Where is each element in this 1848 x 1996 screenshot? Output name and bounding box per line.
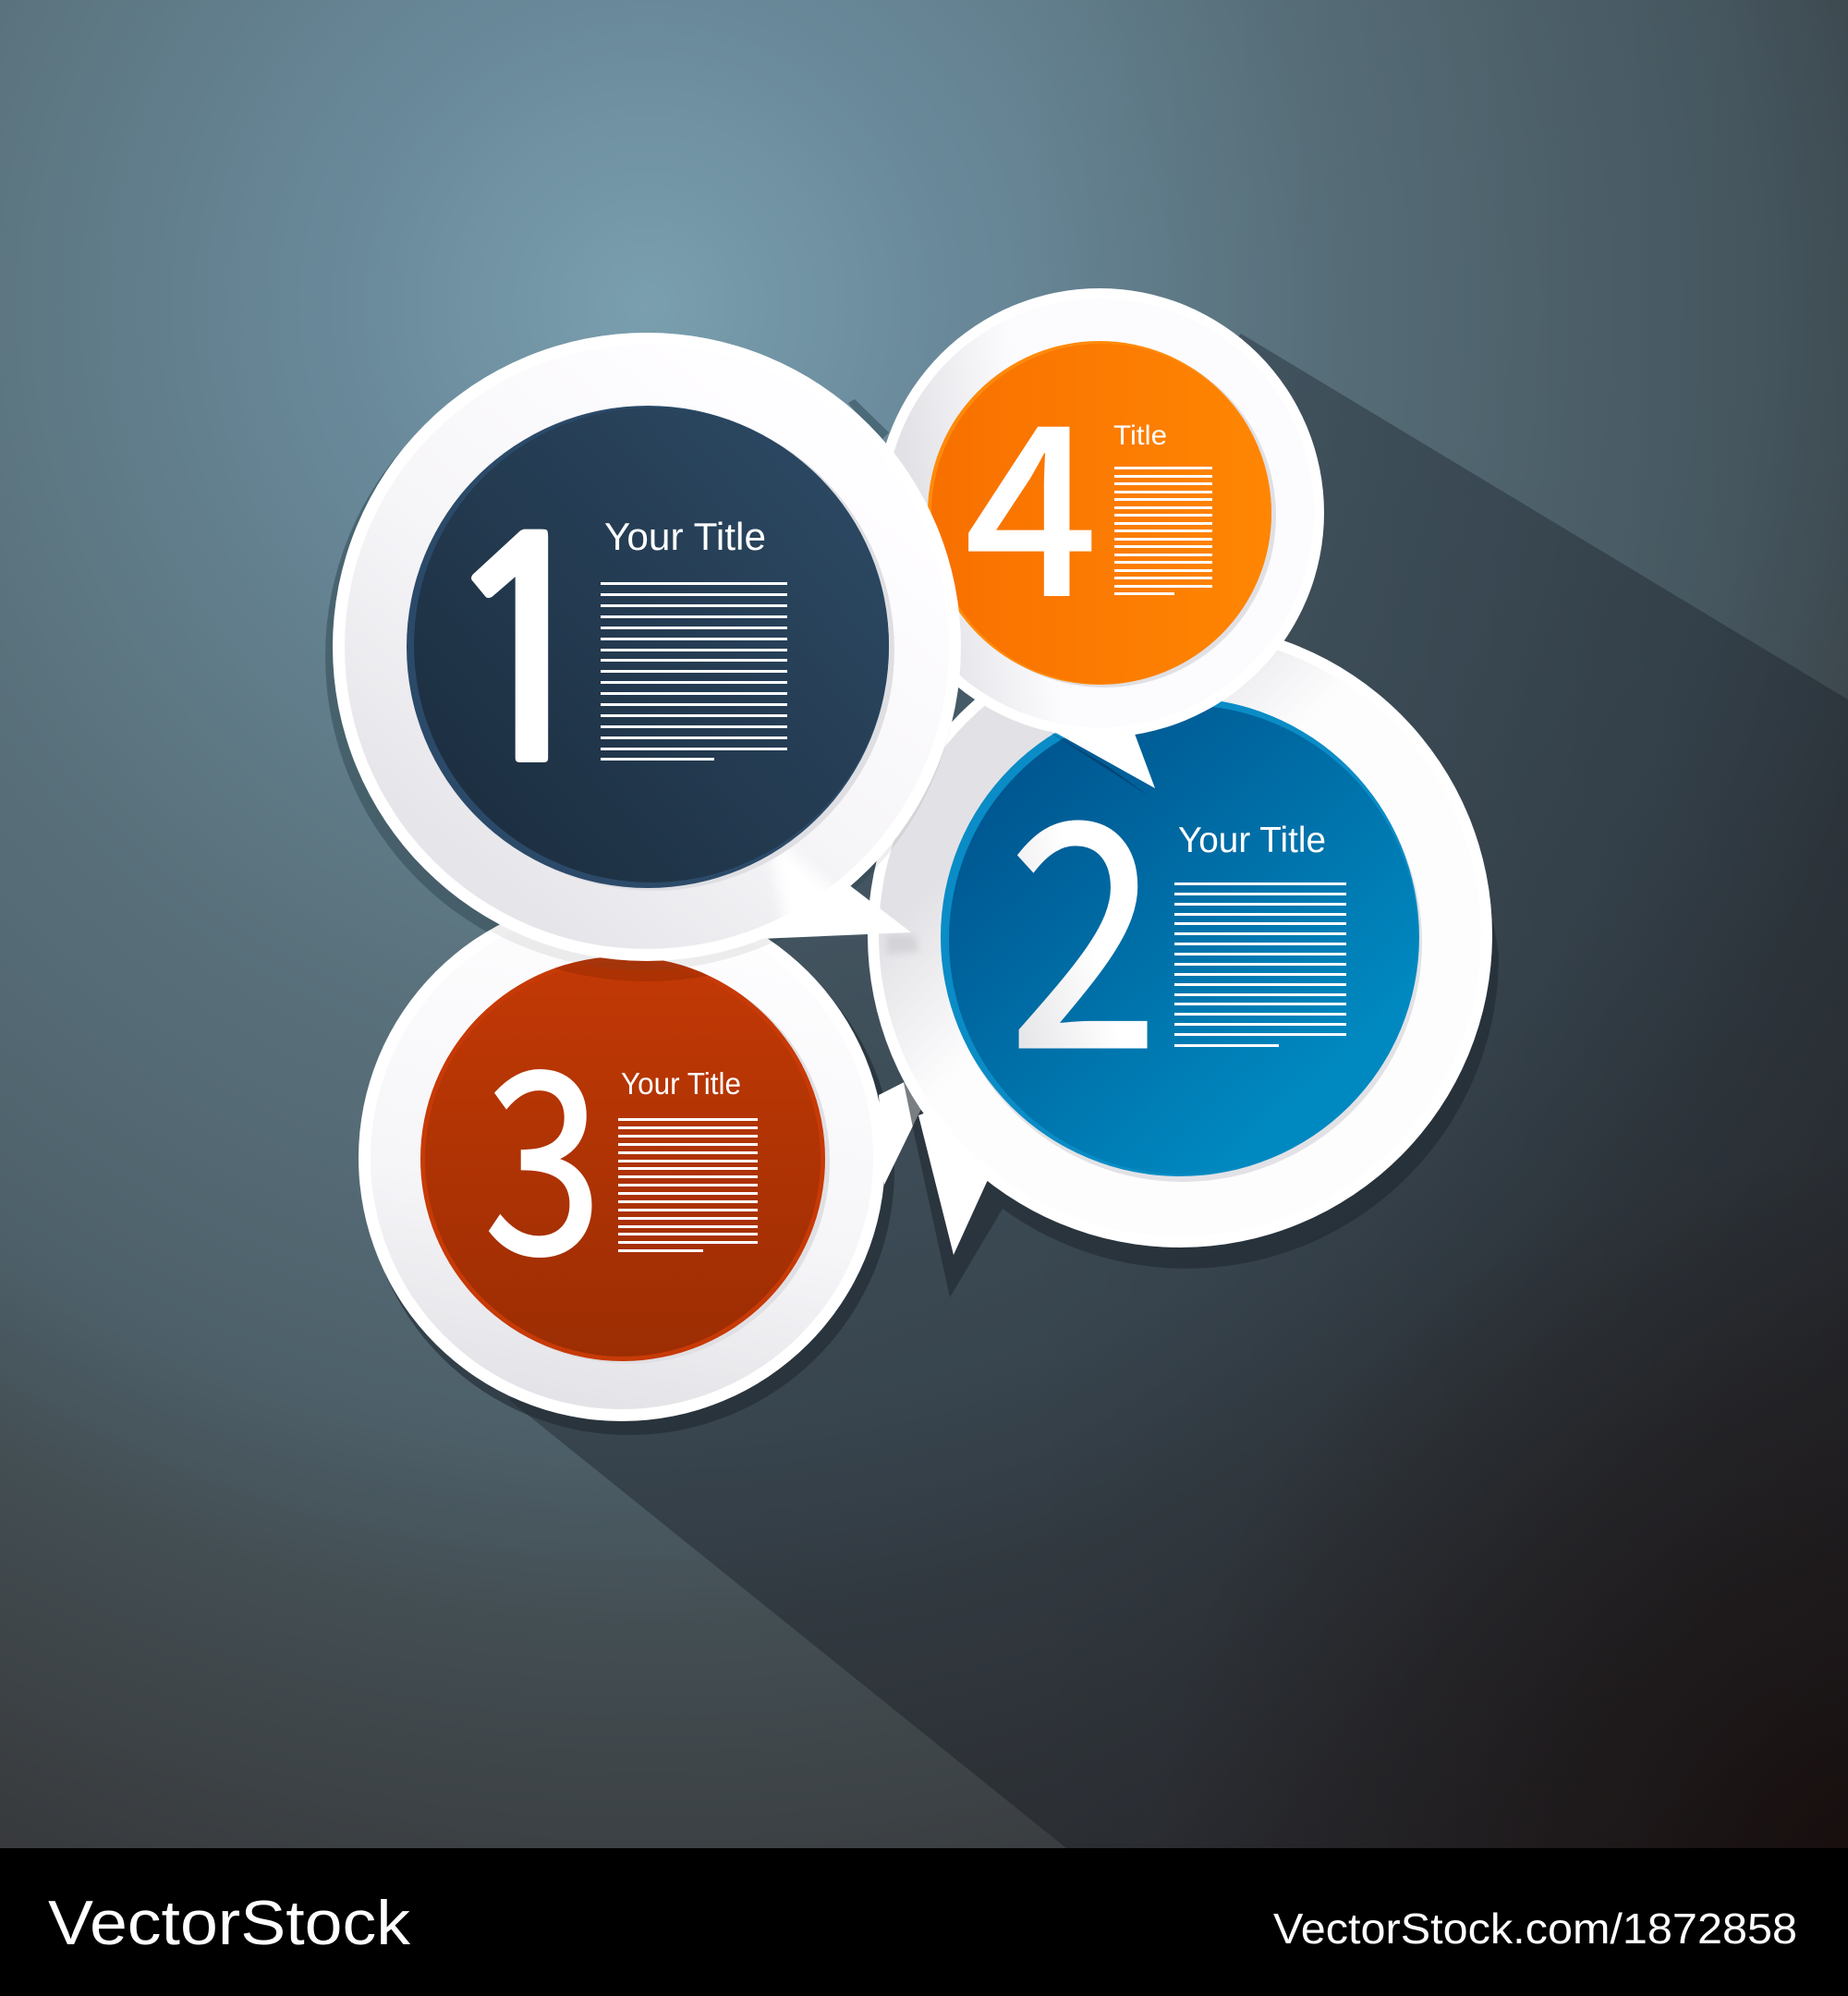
step 1 title: Your Title (604, 515, 766, 558)
step 1 soft shadow on neighbours (327, 338, 959, 970)
step 1 text lines (601, 582, 787, 761)
step 2 speech bubble (868, 623, 1492, 1255)
step 3 number: 3 (484, 961, 602, 1326)
step 3 text lines (618, 1118, 758, 1252)
footer logo: VectorStock (48, 1888, 411, 1958)
panel: step 3 (359, 924, 921, 1435)
step 3 title: Your Title (621, 1066, 741, 1101)
long drop shadow (509, 334, 1848, 1848)
step 1 number: 1 (432, 505, 618, 808)
step 3 speech bubble (359, 895, 942, 1421)
step 4 number: 4 (964, 322, 1099, 664)
step 4 speech bubble (875, 288, 1324, 788)
footer bar (0, 1848, 1848, 1996)
step 1 disc (407, 406, 894, 891)
panel: step 1 (327, 333, 961, 970)
step 2 shadow (878, 678, 1499, 1297)
step 4 disc (928, 341, 1276, 688)
step 1 shadow on background (325, 340, 957, 972)
step 4 title: Title (1113, 420, 1167, 451)
step 4 tail shadow (1047, 730, 1149, 797)
step 2 text lines (1174, 882, 1346, 1047)
step 3 disc (420, 957, 830, 1364)
step 2 title: Your Title (1178, 821, 1326, 860)
step 4 text lines (1114, 467, 1212, 595)
panel: step 2 (868, 623, 1499, 1297)
step 2 disc (941, 698, 1422, 1182)
step 2 number: 2 (1008, 688, 1160, 1138)
step 1 speech bubble (333, 333, 961, 961)
footer url: VectorStock.com/1872858 (1273, 1905, 1797, 1953)
panel: step 4 (875, 288, 1324, 797)
